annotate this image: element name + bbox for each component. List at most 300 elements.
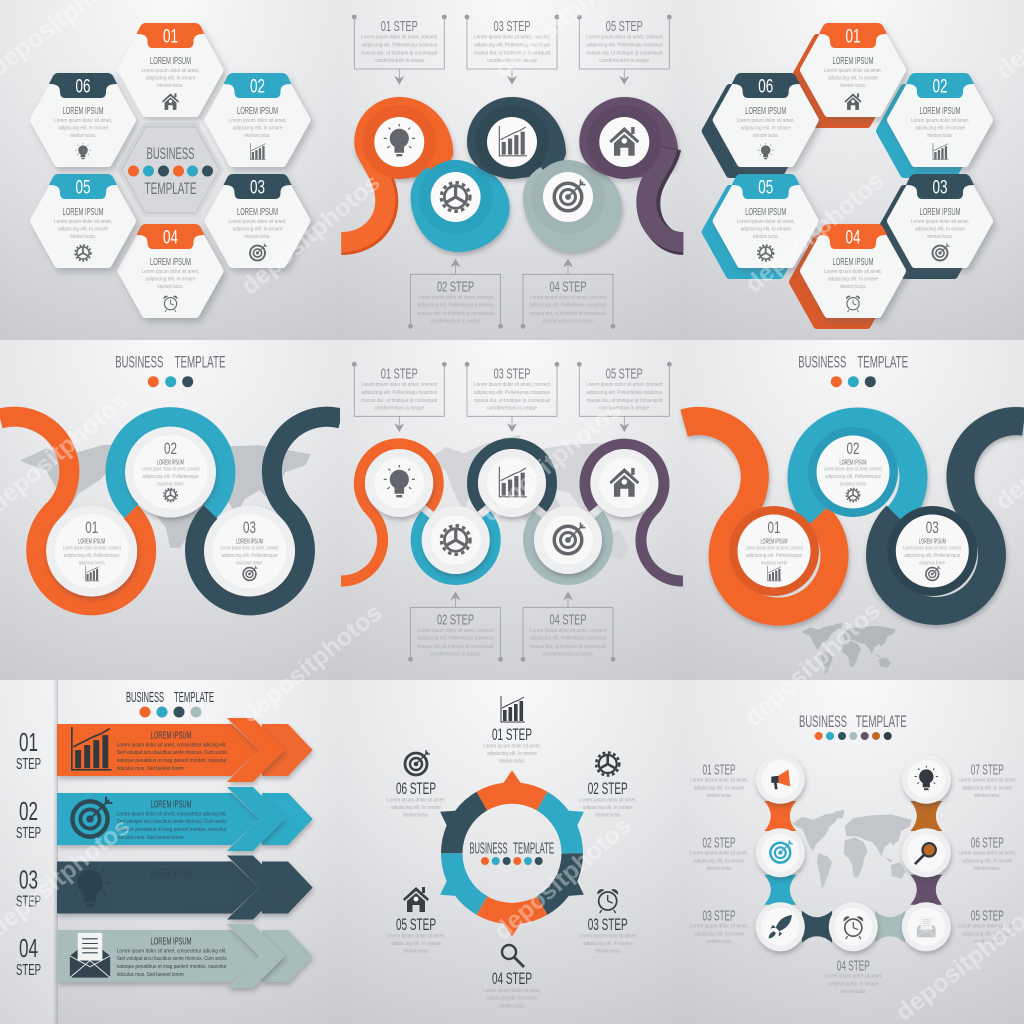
hexagon 03: interdum luctus. xyxy=(244,234,270,240)
hexagon 05: 05 xyxy=(76,178,90,198)
title: TEMPLATE xyxy=(857,352,908,372)
panel: thick figure-eight rings xyxy=(684,340,1024,680)
watermarks: depositphotos xyxy=(489,811,637,946)
step box 05: adipiscing elit. Pellentesqu maximus xyxy=(586,42,663,48)
step box 05: adipiscing elit. Pellentesqu maximus xyxy=(586,390,663,396)
hexagon 06: Lorem ipsum dolor sit amet, xyxy=(737,118,795,124)
step 01: adipiscing elit. In ornare xyxy=(487,751,537,757)
label 05 step: adipiscing elit. In ornare xyxy=(962,932,1013,938)
hexagon 01: adipiscing elit. In ornare xyxy=(828,76,878,82)
hexagon 04 xyxy=(804,224,902,314)
label 02 step: 02 STEP xyxy=(702,834,736,852)
hexagon 04: interdum luctus. xyxy=(158,284,184,290)
arrow row 03: STEP xyxy=(16,894,41,910)
step 05: adipiscing elit. In ornare xyxy=(391,941,441,947)
arrow row 01: LOREM IPSUM xyxy=(150,730,192,742)
step box 04: Lorem ipsum dolor sit amet, connect xyxy=(530,295,607,301)
hexagon 05 xyxy=(34,174,132,264)
title: TEMPLATE xyxy=(856,712,907,731)
step 05: 05 STEP xyxy=(396,915,436,934)
label 02 step: adipiscing elit. In ornare xyxy=(694,858,744,864)
step box 01: 01 STEP xyxy=(381,365,418,382)
label 01 step: adipiscing elit. In ornare xyxy=(694,786,744,792)
step box 05: massa dui, ut tristique ip consequat xyxy=(586,398,663,404)
step box 02: adipiscing elit. Pellentesqu maximus xyxy=(418,302,494,308)
step box 03 xyxy=(465,15,559,84)
disc 01: 01 xyxy=(85,518,98,537)
hexagon 05: 05 xyxy=(758,178,773,198)
disc 03: Lorem ipsum dolor sit amet, connect xyxy=(903,546,962,552)
label 04 step: 04 STEP xyxy=(837,958,870,974)
step 01: 01 STEP xyxy=(492,725,532,744)
arrow row 01: 01 xyxy=(19,727,38,757)
step 5 blob with purple tail: house xyxy=(579,97,683,244)
disc 02: maximus lorem xyxy=(158,482,184,488)
disc 01: Lorem ipsum dolor sit amet, connect xyxy=(63,546,121,552)
disc 02: maximus lorem xyxy=(840,482,866,488)
title: BUSINESS xyxy=(798,352,846,372)
disc: house xyxy=(590,449,658,517)
panel: figure-eight rings with map xyxy=(0,340,341,680)
step box 05: Lorem ipsum dolor sit amet, connect xyxy=(586,382,663,388)
watermarks: depositphotos xyxy=(739,596,886,732)
hexagon 01 xyxy=(804,23,902,113)
step box 02: condimentum is neque xyxy=(430,318,481,324)
disc 02: LOREM IPSUM xyxy=(157,460,184,466)
step box 02 xyxy=(408,592,502,661)
arrow row 01: STEP xyxy=(16,756,41,773)
disc: gear xyxy=(422,506,490,574)
disc 03: 03 xyxy=(926,518,939,537)
disc 01: LOREM IPSUM xyxy=(761,538,788,546)
node 04: clock xyxy=(829,902,878,951)
label 04 step: adipiscing elit. In ornare xyxy=(828,982,879,988)
step box 03: Lorem ipsum dolor sit amet, connect xyxy=(474,382,551,388)
arrow row 04: LOREM IPSUM xyxy=(150,936,192,948)
step box 03: 03 STEP xyxy=(494,365,530,382)
step box 02: 02 STEP xyxy=(437,278,474,295)
step box 02: adipiscing elit. Pellentesqu maximus xyxy=(418,635,494,641)
world map xyxy=(792,810,912,890)
hexagon 03: 03 xyxy=(250,178,265,198)
label 05 step: interdum luctus. xyxy=(974,939,1000,945)
title: BUSINESS xyxy=(126,689,164,706)
hexagon 06: interdum luctus. xyxy=(70,133,96,139)
label 03 step: Lorem ipsum dolor sit amet, xyxy=(690,924,748,930)
step box 04: Lorem ipsum dolor sit amet, connect xyxy=(530,628,607,634)
arrow row 01 xyxy=(16,718,313,782)
step box 02: massa dui, ut tristique ip consequat xyxy=(418,644,494,650)
hexagon 03 xyxy=(891,174,989,264)
label 05 step: Lorem ipsum dolor sit amet, xyxy=(958,924,1016,930)
step 06: 06 STEP xyxy=(396,779,436,798)
hexagon 06 xyxy=(717,73,815,163)
hexagon 01: Lorem ipsum dolor sit amet, xyxy=(824,68,882,74)
step box 03: 03 STEP xyxy=(494,18,530,35)
step 03: 03 STEP xyxy=(588,915,628,934)
step box 05: 05 STEP xyxy=(606,18,643,35)
arrow row 02: Sed volutpat arcu faucibus sente rhoncus. Cum sociis xyxy=(117,819,227,825)
step box 02 xyxy=(408,259,502,328)
disc 01: Lorem ipsum dolor sit amet, connect xyxy=(745,546,803,552)
step 4 blob: target xyxy=(523,160,622,252)
step 03 xyxy=(579,889,637,954)
disc 01 xyxy=(46,506,137,596)
hexagon 03: LOREM IPSUM xyxy=(920,206,960,218)
step box 03 xyxy=(465,362,559,431)
step box 01: adipiscing elit. Pellentesqu maximus xyxy=(361,390,438,396)
step 04 xyxy=(483,945,541,1010)
hexagon 04: Lorem ipsum dolor sit amet, xyxy=(824,269,882,275)
node 06: magnifier xyxy=(902,828,951,877)
step box 01 xyxy=(352,362,446,431)
arrow row 03: natoque penatibus et mag parient montes, nascetur xyxy=(117,896,227,902)
disc 02: Lorem ipsum dolor sit amet, connect xyxy=(824,466,882,472)
hexagon 06: LOREM IPSUM xyxy=(745,105,786,117)
step 05: Lorem ipsum dolor sit amet, xyxy=(387,934,445,940)
hexagon 03: adipiscing elit. In ornare xyxy=(915,226,965,232)
disc 02 xyxy=(808,427,898,517)
label 02 step: Lorem ipsum dolor sit amet, xyxy=(690,850,748,856)
panel: arrow banners xyxy=(0,680,340,1024)
disc 03: LOREM IPSUM xyxy=(919,538,946,546)
hexagon 01: LOREM IPSUM xyxy=(832,55,874,67)
label 07 step: interdum luctus. xyxy=(974,793,1000,799)
hexagon 04: adipiscing elit. In ornare xyxy=(146,276,196,282)
ribbon rings xyxy=(341,444,683,581)
disc: chart xyxy=(478,449,546,517)
ribbon rings xyxy=(0,417,341,605)
hexagon 03: Lorem ipsum dolor sit amet, xyxy=(228,219,286,225)
hexagon 02: interdum luctus. xyxy=(927,133,953,139)
step box 01: massa dui, ut tristique ip consequat xyxy=(361,50,438,56)
step box 03: massa dui, ut tristique ip consequat xyxy=(474,50,551,56)
step 06: interdum luctus. xyxy=(403,812,429,818)
hexagon 02: adipiscing elit. In ornare xyxy=(232,126,283,132)
disc 03 xyxy=(204,506,295,596)
arrow row 01: Lorem ipsum dolor sit amet, consectetur adicing elit. xyxy=(117,742,227,748)
hexagon 03 xyxy=(208,174,306,264)
step 03: Lorem ipsum dolor sit amet, xyxy=(579,934,637,940)
step box 04: adipiscing elit. Pellentesqu maximus xyxy=(530,635,606,641)
hexagon 06: LOREM IPSUM xyxy=(62,105,104,117)
title: TEMPLATE xyxy=(174,689,214,706)
disc 02 xyxy=(125,426,216,518)
hexagon 04: LOREM IPSUM xyxy=(150,256,191,268)
step box 01: Lorem ipsum dolor sit amet, connect xyxy=(361,35,438,41)
arrow row 02: ridiculus mus. Sed laoreet lorem xyxy=(117,835,184,841)
hexagon 03: Lorem ipsum dolor sit amet, xyxy=(911,219,969,225)
connectors xyxy=(764,801,942,943)
step box 04 xyxy=(521,259,615,328)
step box 01: massa dui, ut tristique ip consequat xyxy=(361,398,438,404)
hexagon 02: interdum luctus. xyxy=(244,133,270,139)
node 01: megaphone xyxy=(756,755,805,804)
disc 01: maximus lorem xyxy=(79,560,105,566)
label 03 step xyxy=(690,908,748,945)
hexagon 06: 06 xyxy=(76,76,90,98)
title xyxy=(115,352,226,387)
hexagon 06: 06 xyxy=(758,76,773,98)
step box 04: 04 STEP xyxy=(550,278,586,295)
arrow row 04: Lorem ipsum dolor sit amet, consectetur adicing elit. xyxy=(117,948,227,954)
step box 01: adipiscing elit. Pellentesqu maximus xyxy=(361,42,438,48)
disc 01: 01 xyxy=(768,518,780,537)
step 01 xyxy=(483,696,541,764)
label 05 step xyxy=(958,908,1016,945)
arrow row 01: Sed volutpat arcu faucibus sente rhoncus. Cum sociis xyxy=(117,750,227,756)
hexagon 05: adipiscing elit. In ornare xyxy=(58,226,108,232)
arrow row 03 xyxy=(16,856,313,920)
step 02: adipiscing elit. In ornare xyxy=(583,805,633,811)
arrow row 04: natoque penatibus et mag parient montes, nascetur xyxy=(117,964,227,970)
arrow row 03: ridiculus mus. Sed laoreet lorem xyxy=(117,903,184,909)
hexagon 01 xyxy=(122,23,220,113)
hexagon 01: adipiscing elit. In ornare xyxy=(146,76,196,82)
disc 02: adipiscing elit. Pellentesque xyxy=(825,474,881,480)
step box 01 xyxy=(352,15,446,84)
arrow row 04: 04 xyxy=(19,933,38,963)
step box 03: massa dui, ut tristique ip consequat xyxy=(474,398,551,404)
disc 03: maximus lorem xyxy=(919,560,945,566)
label 02 step xyxy=(690,834,748,872)
step 03: interdum luctus. xyxy=(595,948,621,954)
disc 03: Lorem ipsum dolor sit amet, connect xyxy=(220,546,279,552)
hexagon 02: 02 xyxy=(250,76,265,98)
label 01 step: Lorem ipsum dolor sit amet, xyxy=(690,778,748,784)
hexagon 03: interdum luctus. xyxy=(927,234,953,240)
arrow row 03: LOREM IPSUM xyxy=(150,867,192,879)
centre hexagon: business template: TEMPLATE xyxy=(144,179,196,198)
arrow row 03: Sed volutpat arcu faucibus sente rhoncus. Cum sociis xyxy=(117,888,227,894)
step 02: 02 STEP xyxy=(588,779,628,798)
arrow row 04: ridiculus mus. Sed laoreet lorem xyxy=(117,972,184,978)
disc 01 xyxy=(729,506,819,596)
step box 05: Lorem ipsum dolor sit amet, connect xyxy=(586,35,663,41)
world map xyxy=(802,623,896,675)
hexagon 05: interdum luctus. xyxy=(70,234,96,240)
watermarks: depositphotos xyxy=(477,395,627,528)
disc 03 xyxy=(887,506,977,596)
arrow row 03: 03 xyxy=(19,864,38,894)
step 04: 04 STEP xyxy=(492,969,532,988)
disc 02: 02 xyxy=(164,439,177,458)
node 07: bulb xyxy=(902,755,951,804)
panel: thin ribbon steps with map xyxy=(340,340,684,680)
step box 01: 01 STEP xyxy=(381,18,418,35)
step 06 xyxy=(387,750,445,818)
label 02 step: interdum luctus. xyxy=(706,866,732,872)
hexagon 02: adipiscing elit. In ornare xyxy=(915,126,965,132)
disc 01: adipiscing elit. Pellentesque xyxy=(64,553,120,559)
hexagon 01: 01 xyxy=(163,26,178,48)
arrow row 02: Lorem ipsum dolor sit amet, consectetur adicing elit. xyxy=(117,812,227,818)
world map xyxy=(20,438,311,568)
step 03: adipiscing elit. In ornare xyxy=(583,941,633,947)
centre title: BUSINESS xyxy=(470,840,508,858)
step box 03: condimentum is neque xyxy=(487,405,537,411)
hexagon 04: interdum luctus. xyxy=(840,284,866,290)
hexagon 03: 03 xyxy=(932,178,948,198)
hexagon 05: LOREM IPSUM xyxy=(745,206,786,218)
arrow row 04: Sed volutpat arcu faucibus sente rhoncus. Cum sociis xyxy=(117,956,227,962)
title xyxy=(799,712,907,740)
coloured back hexagons xyxy=(706,38,978,325)
node 05: envelope xyxy=(902,902,951,951)
step 04: adipiscing elit. In ornare xyxy=(487,996,537,1002)
hexagon 06 xyxy=(34,73,132,163)
arrow row 04 xyxy=(16,924,313,988)
step box 04: condimentum is neque xyxy=(543,318,593,324)
step box 04: condimentum is neque xyxy=(543,651,593,657)
step box 04 xyxy=(521,592,615,661)
step box 04: massa dui, ut tristique ip consequat xyxy=(530,644,607,650)
step box 05: condimentum is neque xyxy=(599,405,650,411)
arrow row 02 xyxy=(16,787,313,851)
disc 02: 02 xyxy=(846,439,860,458)
hexagon 04: 04 xyxy=(846,228,861,248)
disc 01: adipiscing elit. Pellentesque xyxy=(746,553,802,559)
hexagon 01: Lorem ipsum dolor sit amet, xyxy=(142,68,200,74)
step 04: Lorem ipsum dolor sit amet, xyxy=(483,988,541,994)
arrow row 01: natoque penatibus et mag parient montes, nascetur xyxy=(117,758,227,764)
step box 03: adipiscing elit. Pellentesqu maximus xyxy=(474,390,550,396)
disc 03: 03 xyxy=(243,518,256,537)
hexagon 04 xyxy=(122,224,220,314)
hexagon 02: Lorem ipsum dolor sit amet, xyxy=(228,118,286,124)
step box 05: condimentum is neque xyxy=(599,58,650,64)
step box 05 xyxy=(577,362,671,431)
panel: six-segment ring: TEMPLATE xyxy=(513,840,554,858)
step box 04: 04 STEP xyxy=(550,611,586,628)
hexagon 02: LOREM IPSUM xyxy=(920,105,960,117)
hexagon 05: Lorem ipsum dolor sit amet, xyxy=(54,219,112,225)
step box 03: adipiscing elit. Pellentesqu maximus xyxy=(474,42,550,48)
hexagon 05: adipiscing elit. In ornare xyxy=(741,226,791,232)
step 2 blob: gear xyxy=(411,160,510,252)
hexagon 01: interdum luctus. xyxy=(158,83,184,89)
label 06 step xyxy=(958,834,1016,872)
hexagon 05: Lorem ipsum dolor sit amet, xyxy=(737,219,795,225)
disc: bulb xyxy=(365,449,433,517)
panel: ribbon steps with thick blobs xyxy=(340,0,684,340)
label 06 step: adipiscing elit. In ornare xyxy=(962,858,1013,864)
watermarks: depositphotos xyxy=(236,599,388,729)
watermarks: depositphotos xyxy=(740,166,890,299)
disc 03: adipiscing elit. Pellentesque xyxy=(904,553,960,559)
node 03: rocket xyxy=(756,902,805,951)
hexagon 02 xyxy=(208,73,306,163)
disc 03: maximus lorem xyxy=(236,560,262,566)
hexagon 02: 02 xyxy=(932,76,948,98)
hexagon 02 xyxy=(891,73,989,163)
hexagon 02: LOREM IPSUM xyxy=(237,105,278,117)
disc 01: LOREM IPSUM xyxy=(78,538,105,546)
thick ribbons xyxy=(684,421,1024,612)
step 1 blob with orange tail: bulb xyxy=(341,97,453,244)
arrow row 02: 02 xyxy=(19,796,38,826)
arrow row 02: LOREM IPSUM xyxy=(150,798,192,810)
panel: hexagon infographic with centre title xyxy=(0,0,340,340)
arrow row 03: Lorem ipsum dolor sit amet, consectetur adicing elit. xyxy=(117,880,227,886)
arrow row 01: ridiculus mus. Sed laoreet lorem xyxy=(117,766,184,772)
panel: offset coloured hexagons xyxy=(684,0,1024,340)
label 01 step: interdum luctus. xyxy=(706,793,732,799)
disc 03: adipiscing elit. Pellentesque xyxy=(222,553,278,559)
step 06: adipiscing elit. In ornare xyxy=(391,805,441,811)
label 06 step: Lorem ipsum dolor sit amet, xyxy=(958,850,1016,856)
hexagon 06: adipiscing elit. In ornare xyxy=(741,126,791,132)
hexagon 06: adipiscing elit. In ornare xyxy=(58,126,108,132)
title: TEMPLATE xyxy=(174,352,226,372)
step box 04: adipiscing elit. Pellentesqu maximus xyxy=(530,302,606,308)
label 03 step: interdum luctus. xyxy=(706,939,732,945)
label 04 step xyxy=(824,958,882,995)
step box 02: massa dui, ut tristique ip consequat xyxy=(418,311,494,317)
panel: six-segment ring xyxy=(340,680,684,1024)
arrow row 04: STEP xyxy=(16,962,41,979)
step box 03: Lorem ipsum dolor sit amet, connect xyxy=(474,35,551,41)
step box 05 xyxy=(577,15,671,84)
label 03 step: 03 STEP xyxy=(702,908,736,924)
step 02: interdum luctus. xyxy=(595,812,621,818)
world map xyxy=(427,435,640,580)
step 01: Lorem ipsum dolor sit amet, xyxy=(483,744,541,750)
label 07 step xyxy=(958,762,1016,799)
disc 02: LOREM IPSUM xyxy=(840,460,867,466)
label 06 step: interdum luctus. xyxy=(974,866,1000,872)
step 06: Lorem ipsum dolor sit amet, xyxy=(387,798,445,804)
disc 01: maximus lorem xyxy=(761,560,787,566)
label 01 step xyxy=(690,762,748,799)
step box 02: Lorem ipsum dolor sit amet, connect xyxy=(418,295,494,301)
step box 01: Lorem ipsum dolor sit amet, connect xyxy=(361,382,438,388)
step box 02: Lorem ipsum dolor sit amet, connect xyxy=(418,628,494,634)
panel: seven-node loop with map xyxy=(684,680,1024,1024)
step 02 xyxy=(579,752,637,818)
hexagon 05 xyxy=(717,174,815,264)
hexagon 05: interdum luctus. xyxy=(753,234,779,240)
step 05 xyxy=(387,887,445,954)
step box 05: massa dui, ut tristique ip consequat xyxy=(586,50,663,56)
label 04 step: interdum luctus. xyxy=(840,989,866,995)
watermarks: depositphotos xyxy=(236,168,386,301)
hexagon 04: adipiscing elit. In ornare xyxy=(828,276,878,282)
disc 03: LOREM IPSUM xyxy=(236,538,263,546)
title xyxy=(798,352,908,387)
step box 04: massa dui, ut tristique ip consequat xyxy=(530,311,607,317)
arrow row 02: STEP xyxy=(16,825,41,842)
step box 05: 05 STEP xyxy=(606,365,643,382)
title xyxy=(126,689,214,718)
disc: target xyxy=(534,506,602,574)
disc 02: Lorem ipsum dolor sit amet, connect xyxy=(142,466,200,472)
hexagon 01: 01 xyxy=(846,26,860,48)
title: BUSINESS xyxy=(799,712,847,731)
centre hexagon: business template xyxy=(122,127,220,213)
hexagon 03: adipiscing elit. In ornare xyxy=(232,226,283,232)
hexagon 06: interdum luctus. xyxy=(753,133,779,139)
label 07 step: Lorem ipsum dolor sit amet, xyxy=(958,778,1016,784)
centre hexagon: business template: BUSINESS xyxy=(146,144,194,163)
left strip xyxy=(0,680,58,1024)
step 01: interdum luctus. xyxy=(499,758,525,764)
disc 02: adipiscing elit. Pellentesque xyxy=(142,474,199,480)
step 3 blob: chart xyxy=(467,97,566,179)
hexagon 04: LOREM IPSUM xyxy=(832,256,874,268)
title: BUSINESS xyxy=(115,352,163,372)
hexagon 04: 04 xyxy=(163,228,178,248)
